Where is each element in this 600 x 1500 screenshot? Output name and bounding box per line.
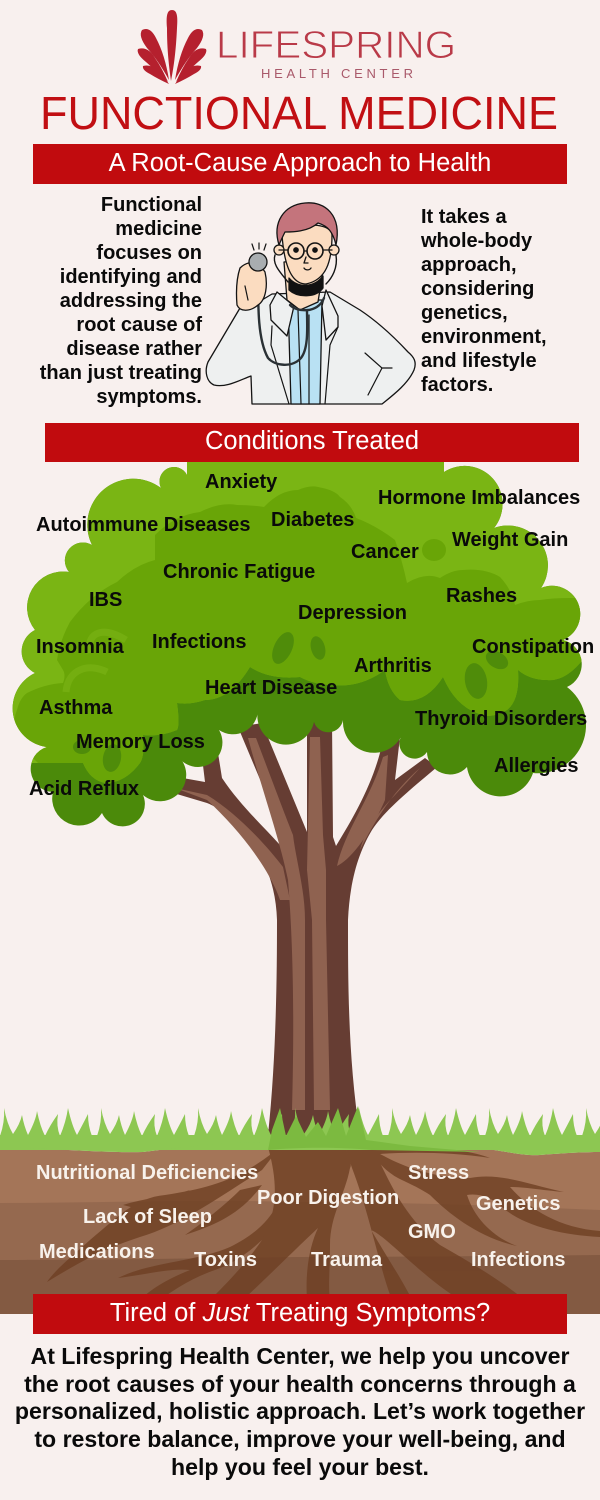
banner: root-cause approach <box>33 144 567 184</box>
condition labels: Memory Loss <box>76 731 205 753</box>
text block: right description: environment, <box>421 326 547 348</box>
root cause labels: Toxins <box>194 1249 257 1271</box>
text block: left description: symptoms. <box>96 386 202 408</box>
icon: doctor with stethoscope <box>206 203 415 404</box>
condition labels <box>29 471 594 800</box>
root cause labels: Poor Digestion <box>257 1187 399 1209</box>
icon: logo fountain <box>138 10 206 84</box>
text block: left description: Functional <box>101 194 202 216</box>
text block: right description: genetics, <box>421 302 508 324</box>
tree canopy foliage <box>12 462 586 826</box>
condition labels: Cancer <box>351 541 419 563</box>
closing paragraph: the root causes of your health concerns through a <box>24 1371 576 1397</box>
root cause labels: Infections <box>471 1249 565 1271</box>
root cause labels: Trauma <box>311 1249 383 1271</box>
condition labels: IBS <box>89 589 122 611</box>
title: FUNCTIONAL MEDICINE <box>40 87 558 139</box>
banner: tired of just treating symptoms <box>33 1294 567 1334</box>
condition labels: Hormone Imbalances <box>378 487 580 509</box>
text block: left description: addressing the <box>60 290 202 312</box>
text block: left description: root cause of <box>76 314 202 336</box>
text block: right description: and lifestyle <box>421 350 537 372</box>
root cause labels: Medications <box>39 1241 155 1263</box>
condition labels: Diabetes <box>271 509 354 531</box>
text block: right description: whole-body <box>420 230 533 252</box>
condition labels: Chronic Fatigue <box>163 561 315 583</box>
condition labels: Autoimmune Diseases <box>36 514 251 536</box>
text block: left description: than just treating <box>40 362 202 384</box>
banner: root-cause approach: A Root-Cause Approach to Health <box>109 149 491 177</box>
text block: left description: focuses on <box>96 242 202 264</box>
condition labels: Heart Disease <box>205 677 337 699</box>
condition labels: Acid Reflux <box>29 778 139 800</box>
condition labels: Asthma <box>39 697 113 719</box>
condition labels: Anxiety <box>205 471 278 493</box>
root cause labels: Stress <box>408 1162 469 1184</box>
logo <box>138 10 456 84</box>
root cause labels <box>36 1162 565 1271</box>
text block: left description: identifying and <box>60 266 202 288</box>
soil layers <box>0 1142 600 1314</box>
condition labels: Insomnia <box>36 636 125 658</box>
condition labels: Rashes <box>446 585 517 607</box>
closing paragraph: help you feel your best. <box>171 1454 429 1480</box>
text block: right description: factors. <box>421 374 493 396</box>
text block: right description: approach, <box>421 254 517 276</box>
text block: left description: disease rather <box>66 338 202 360</box>
root cause labels: GMO <box>408 1221 456 1243</box>
root cause labels: Genetics <box>476 1193 560 1215</box>
text block: left description: medicine <box>115 218 202 240</box>
condition labels: Infections <box>152 631 246 653</box>
logo subtitle: HEALTH CENTER <box>261 66 413 81</box>
banner: conditions treated: Conditions Treated <box>205 427 419 455</box>
text block: right description: It takes a <box>421 206 507 228</box>
closing paragraph: At Lifespring Health Center, we help you uncover <box>31 1343 569 1369</box>
condition labels: Constipation <box>472 636 594 658</box>
condition labels: Weight Gain <box>452 529 568 551</box>
tree <box>0 450 600 1135</box>
logo wordmark: LIFESPRING <box>216 24 456 67</box>
closing paragraph: personalized, holistic approach. Let’s work together <box>15 1398 585 1424</box>
banner: conditions treated <box>45 423 579 462</box>
tree roots <box>47 1147 600 1300</box>
condition labels: Depression <box>298 602 407 624</box>
condition labels: Thyroid Disorders <box>415 708 587 730</box>
tree trunk and branches <box>170 720 437 1135</box>
closing paragraph: to restore balance, improve your well-being, and <box>34 1426 566 1452</box>
root cause labels: Nutritional Deficiencies <box>36 1162 258 1184</box>
text block: right description: considering <box>421 278 534 300</box>
condition labels: Allergies <box>494 755 578 777</box>
grass <box>0 1100 600 1155</box>
condition labels: Arthritis <box>354 655 432 677</box>
banner: tired of just treating symptoms: Tired of Just Treating Symptoms? <box>110 1299 490 1327</box>
root cause labels: Lack of Sleep <box>83 1206 212 1228</box>
